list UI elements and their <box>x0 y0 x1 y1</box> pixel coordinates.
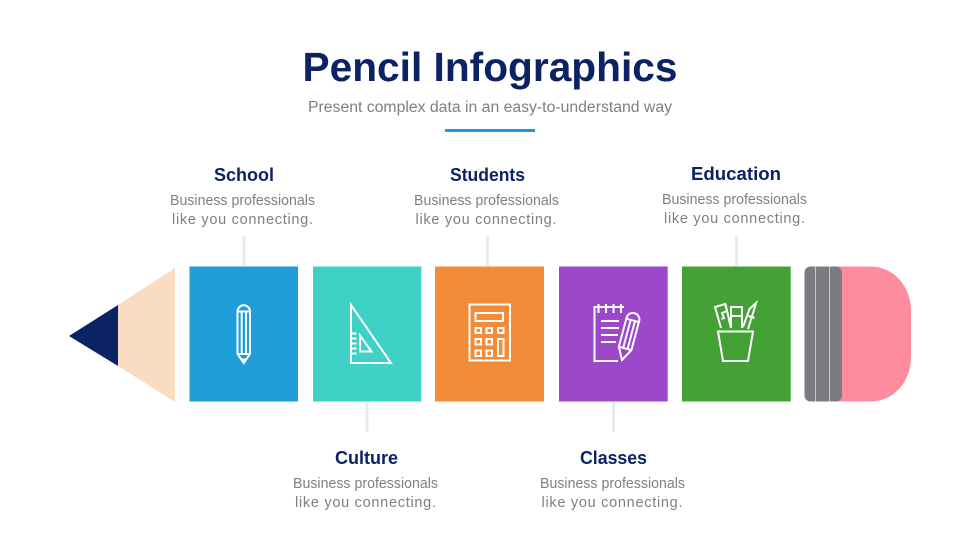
icon: notepad and pencil <box>594 304 641 362</box>
graphite point <box>69 305 118 366</box>
wood cone <box>118 268 175 402</box>
label: classes: like you connecting. <box>542 495 682 511</box>
label: students: like you connecting. <box>416 212 556 228</box>
label: students: Business professionals <box>414 193 559 209</box>
metal ferrule <box>804 266 842 402</box>
label: school: School <box>214 165 274 185</box>
icon: pencil cup <box>715 303 756 361</box>
label: culture: Business professionals <box>293 476 438 492</box>
eraser <box>804 266 911 402</box>
icon: pencil <box>238 305 250 363</box>
title: Pencil Infographics <box>302 44 678 90</box>
label: students: Students <box>450 165 525 185</box>
panel: classes <box>559 266 668 402</box>
label: classes <box>540 448 685 511</box>
panel: culture <box>313 266 421 402</box>
label: culture: like you connecting. <box>295 495 436 511</box>
label: education: Education <box>691 164 781 184</box>
subtitle: Present complex data in an easy-to-understand way <box>308 99 672 116</box>
pencil tip <box>69 268 175 402</box>
icon: calculator <box>470 304 510 360</box>
label: students <box>414 165 559 228</box>
icon: set square <box>351 305 391 363</box>
title underline <box>445 129 535 132</box>
label: culture <box>293 448 438 511</box>
label: school: like you connecting. <box>172 212 313 228</box>
panel: education <box>682 266 791 402</box>
label: education: like you connecting. <box>664 211 805 227</box>
label: education: Business professionals <box>662 192 807 208</box>
label: school: Business professionals <box>170 193 315 209</box>
panel: school <box>190 266 298 402</box>
panel: students <box>435 266 544 402</box>
label: culture: Culture <box>335 448 398 468</box>
label: classes: Business professionals <box>540 476 685 492</box>
label: education <box>662 164 807 227</box>
connector lines <box>242 236 738 432</box>
label: school <box>170 165 315 228</box>
label: classes: Classes <box>580 448 647 468</box>
eraser rubber <box>830 266 911 402</box>
